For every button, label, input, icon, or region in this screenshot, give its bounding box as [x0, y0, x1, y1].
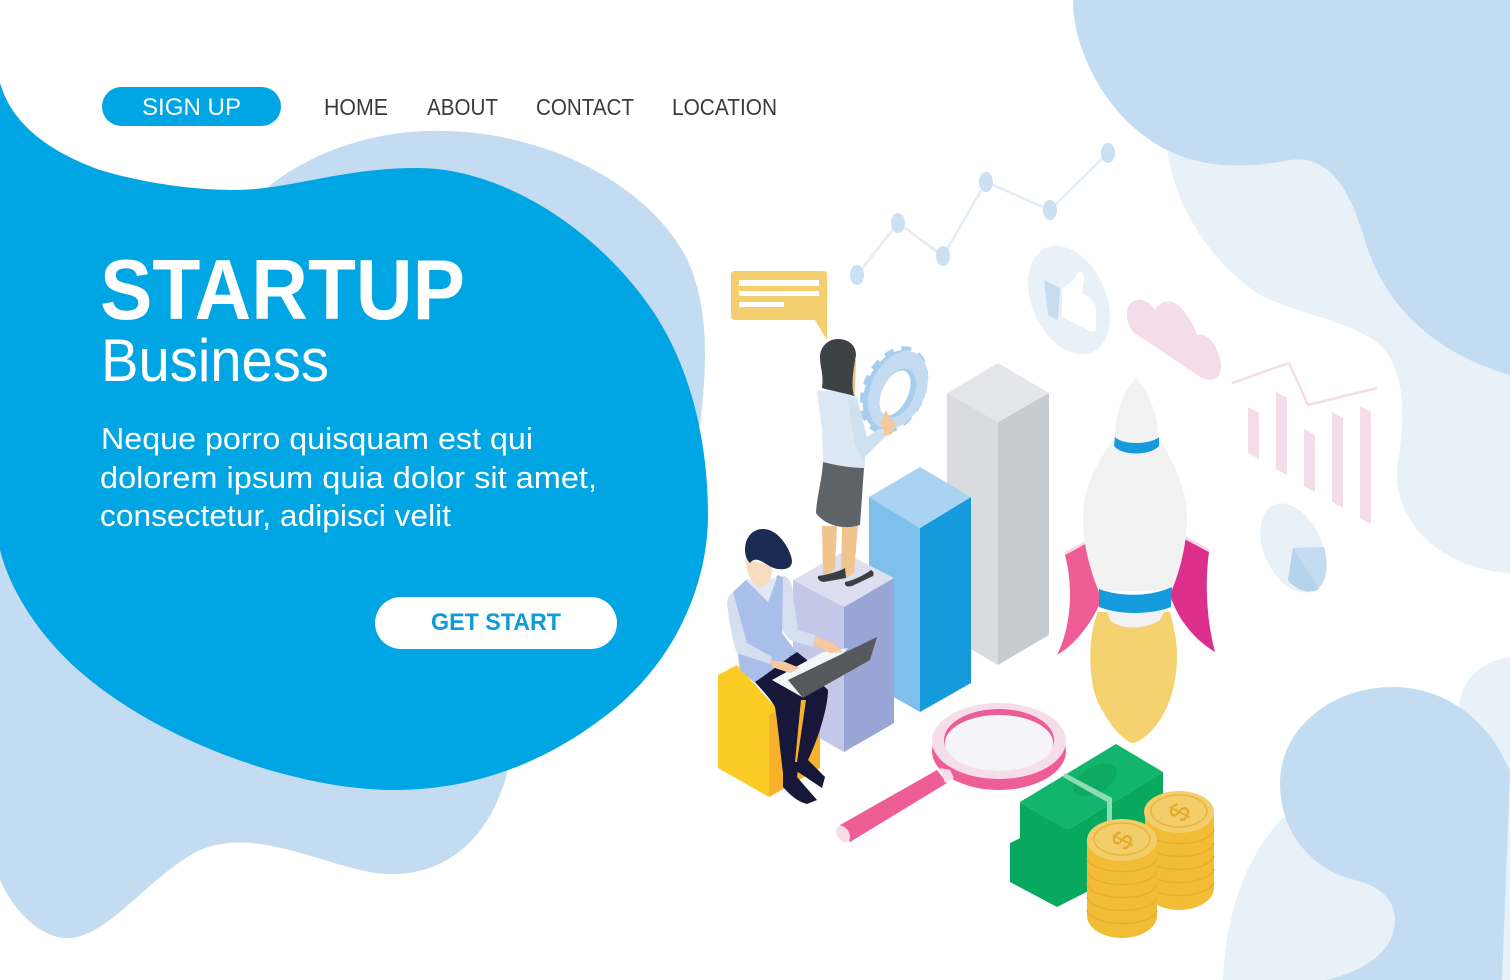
flame: [1090, 612, 1177, 743]
speech bubble: [731, 271, 827, 340]
icon: thumbs up: [1012, 233, 1126, 367]
pie chart (faded): [1247, 493, 1339, 603]
yellow seat box: [718, 665, 820, 797]
vest: [733, 575, 797, 683]
button: get start: [375, 597, 617, 649]
collar: [746, 578, 777, 602]
upper stack top: [1020, 744, 1163, 830]
laptop screen: [788, 637, 877, 698]
navigation links: ABOUT: [427, 94, 498, 120]
right fin top edge: [1177, 532, 1209, 552]
hand: [880, 410, 896, 436]
background: bottom right blobs: [1223, 657, 1510, 980]
body text: Neque porro quisquam est qui: [101, 421, 533, 456]
leg gap stripe: [795, 700, 806, 762]
left fin: [1057, 537, 1103, 655]
blue bar: [869, 467, 971, 712]
hair: [820, 339, 856, 396]
icon: cloud: [1127, 300, 1221, 380]
bill portrait patches: [1068, 757, 1122, 803]
right fin: [1170, 535, 1215, 652]
button: sign up: SIGN UP: [142, 94, 241, 121]
rear leg: [790, 655, 828, 788]
nozzle: [1105, 605, 1168, 628]
front leg: [755, 652, 817, 804]
navigation links: [324, 94, 777, 120]
hair: [745, 529, 792, 569]
hands: [770, 636, 843, 673]
lilac bar: [793, 552, 894, 752]
bar and line chart (faded pink): [1232, 363, 1377, 524]
body text: consectetur, adipisci velit: [100, 498, 451, 533]
lower band: [1099, 587, 1172, 613]
coins: back stack: [1144, 791, 1214, 910]
upper band: [1114, 437, 1159, 454]
navigation links: HOME: [324, 94, 388, 120]
gray bar: [947, 363, 1049, 665]
face: [745, 558, 772, 587]
shoes: [818, 568, 874, 586]
body: [1083, 437, 1187, 592]
gear: [849, 338, 940, 442]
background: light blue blobs behind hero: [0, 131, 705, 938]
body text: [100, 421, 597, 533]
navigation links: CONTACT: [536, 94, 634, 120]
background: top right blobs: [1073, 0, 1510, 573]
person: woman with gear: [816, 339, 896, 586]
person: man with laptop: [727, 529, 877, 804]
laptop base: [772, 648, 848, 697]
coins: front stack: [1087, 819, 1157, 938]
lower stack: [1010, 820, 1110, 907]
navigation links: LOCATION: [672, 94, 777, 120]
panel: main blue hero blob: [0, 83, 708, 790]
blouse: [817, 391, 865, 468]
button: sign up: [102, 87, 281, 126]
skirt: [816, 462, 864, 527]
right sleeve: [778, 575, 815, 647]
subtitle: Business: [101, 327, 329, 394]
legs: [822, 526, 858, 578]
left sleeve: [727, 592, 772, 664]
magnifying glass: [833, 703, 1066, 845]
neck: [846, 360, 856, 396]
paper band: [1063, 773, 1112, 822]
line chart (faded): [850, 143, 1115, 285]
title: STARTUP: [100, 243, 465, 338]
body text: dolorem ipsum quia dolor sit amet,: [100, 460, 597, 495]
button: get start: GET START: [431, 609, 561, 636]
coins: front stack: $: [1105, 826, 1140, 854]
nose: [1115, 378, 1158, 437]
money stack: [1010, 744, 1163, 907]
left fin top edge: [1065, 535, 1098, 555]
coins: back stack: $: [1162, 798, 1197, 826]
arm: [848, 400, 886, 459]
rocket: [1057, 378, 1215, 743]
upper stack sides: [1020, 772, 1163, 888]
